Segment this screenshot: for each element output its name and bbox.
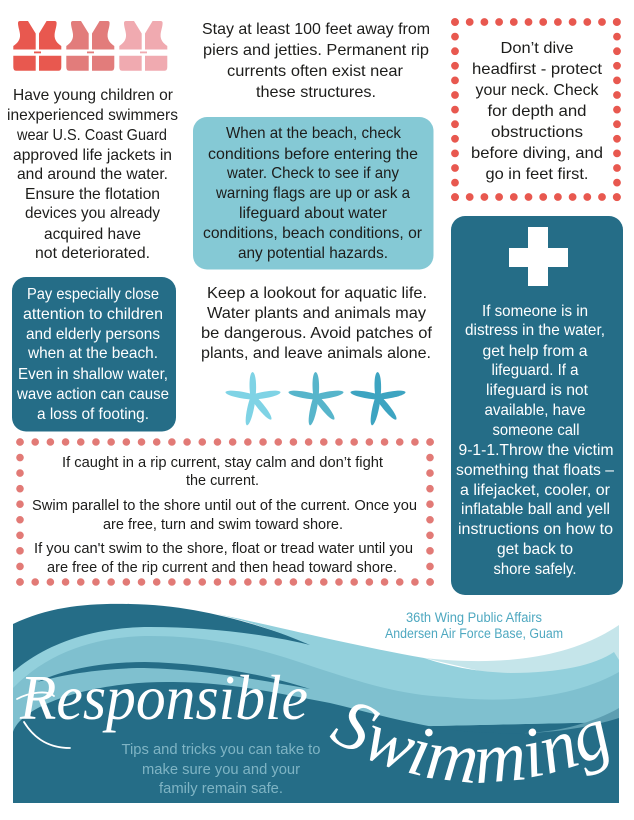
panel: children and elderly: when at the beach. — [27, 345, 158, 362]
panel: get help from a lifeguard: 9-1-1.Throw the victim — [458, 442, 614, 459]
panel: dotted frame, rip current advice: are free of the rip current and then head toward shore. — [47, 560, 397, 576]
text: credit: Andersen Air Force Base, Guam — [385, 626, 563, 641]
panel: dotted frame, diving advice: your neck. Check — [476, 82, 599, 99]
text: life jacket advice: wear U.S. Coast Guard — [16, 127, 167, 144]
panel: dotted frame, rip current advice — [20, 442, 431, 583]
text: credit: 36th Wing Public Affairs — [406, 610, 542, 625]
icon: three life jackets — [13, 21, 167, 71]
panel: check conditions: warning flags are up or ask a — [215, 185, 410, 202]
text: life jacket advice: Have young children or — [13, 87, 174, 104]
text: life jacket advice: and around the water. — [17, 166, 168, 183]
text: piers and jetties advice: Stay at least 100 feet away from — [202, 21, 430, 38]
panel: get help from a lifeguard: get back to — [497, 541, 573, 558]
panel: children and elderly: Pay especially close — [27, 286, 159, 303]
panel: dotted frame, diving advice: Don’t dive — [500, 40, 574, 57]
panel: check conditions: conditions before entering the — [208, 146, 418, 163]
panel: check conditions: lifeguard about water — [239, 205, 388, 222]
panel: dotted frame, diving advice: for depth and — [488, 103, 586, 120]
wave: dark base — [13, 604, 619, 803]
wave: light band — [13, 614, 619, 735]
wave: pale crest — [424, 625, 619, 678]
text: aquatic life advice: plants, and leave animals alone. — [201, 345, 431, 362]
icon: three starfish — [225, 372, 406, 426]
panel: dotted frame, diving advice: go in feet first. — [486, 166, 588, 183]
panel: dotted frame, diving advice — [455, 22, 618, 198]
panel: dotted frame, diving advice: obstructions — [491, 124, 583, 141]
text: aquatic life advice: Keep a lookout for aquatic life. — [207, 285, 427, 302]
panel: get help from a lifeguard: distress in the water, — [465, 322, 605, 339]
wave: dark sliver — [37, 662, 310, 689]
text: life jacket advice: approved life jackets in — [13, 147, 172, 164]
text: life jacket advice: devices you already — [25, 205, 160, 222]
text: tagline: Tips and tricks you can take to — [122, 741, 320, 758]
panel: get help from a lifeguard: get help from a — [482, 343, 588, 360]
text: aquatic life advice — [201, 285, 433, 362]
text: tagline: family remain safe. — [159, 780, 283, 797]
panel: get help from a lifeguard: a lifejacket, cooler, or — [460, 482, 611, 499]
panel: dotted frame, rip current advice: If you can't swim to the shore, float or tread water until you — [34, 541, 413, 557]
panel: get help from a lifeguard: available, have — [484, 402, 586, 419]
panel: check conditions: any potential hazards. — [238, 245, 388, 262]
text: credit — [385, 610, 563, 641]
panel: dotted frame, rip current advice: Swim parallel to the shore until out of the current. Once you — [32, 498, 417, 514]
text: tagline: make sure you and your — [142, 761, 300, 778]
panel: check conditions — [193, 117, 434, 270]
panel: get help from a lifeguard: something that floats – — [456, 462, 614, 479]
panel: children and elderly: and elderly persons — [26, 326, 160, 343]
panel: get help from a lifeguard: someone call — [492, 422, 580, 439]
panel: check conditions: conditions, beach conditions, or — [203, 225, 423, 242]
panel: get help from a lifeguard — [451, 216, 623, 595]
panel: children and elderly: wave action can cause — [16, 386, 169, 403]
wave: dark foreground — [13, 682, 619, 803]
icon: white cross — [509, 227, 568, 286]
panel: get help from a lifeguard: instructions on how to — [458, 521, 613, 538]
panel: dotted frame, diving advice: before diving, and — [471, 145, 603, 162]
panel: dotted frame, rip current advice: the current. — [186, 473, 259, 489]
panel: get help from a lifeguard: shore safely. — [494, 561, 576, 578]
panel: check conditions: water. Check to see if any — [226, 165, 399, 182]
wave: mid band — [13, 636, 619, 735]
text: tagline — [122, 741, 320, 797]
text: life jacket advice: inexperienced swimmers — [7, 107, 178, 124]
panel: children and elderly: Even in shallow water, — [18, 366, 168, 383]
panel: get help from a lifeguard: inflatable ball and yell — [461, 501, 610, 518]
text: piers and jetties advice: piers and jetties. Permanent rip — [203, 42, 429, 59]
text: aquatic life advice: be dangerous. Avoid patches of — [201, 325, 433, 342]
text: piers and jetties advice: these structures. — [256, 84, 376, 101]
panel: get help from a lifeguard: If someone is in — [482, 303, 588, 320]
panel: dotted frame, rip current advice: If caught in a rip current, stay calm and don’t fight — [62, 455, 383, 471]
panel: children and elderly: attention to children — [23, 306, 163, 323]
panel: get help from a lifeguard: lifeguard is not — [486, 382, 589, 399]
text: life jacket advice: not deteriorated. — [35, 245, 150, 262]
title: Responsible: Responsible — [19, 662, 308, 733]
panel: get help from a lifeguard: lifeguard. If a — [492, 362, 579, 379]
text: life jacket advice: Ensure the flotation — [25, 186, 160, 203]
banner: waves and title — [13, 604, 619, 803]
panel: children and elderly: a loss of footing. — [37, 406, 149, 423]
panel: check conditions: When at the beach, check — [226, 125, 402, 142]
panel: children and elderly — [12, 277, 176, 432]
text: piers and jetties advice — [202, 21, 430, 101]
wave: slate edge — [525, 708, 619, 738]
title: Swimming: Swimming — [330, 704, 609, 783]
panel: dotted frame, rip current advice: are free, turn and swim toward shore. — [103, 517, 343, 533]
panel: dotted frame, diving advice: headfirst - protect — [472, 61, 603, 78]
text: life jacket advice — [7, 87, 178, 262]
text: piers and jetties advice: currents often exist near — [227, 63, 404, 80]
text: life jacket advice: acquired have — [44, 226, 141, 243]
text: aquatic life advice: Water plants and animals may — [207, 305, 426, 322]
